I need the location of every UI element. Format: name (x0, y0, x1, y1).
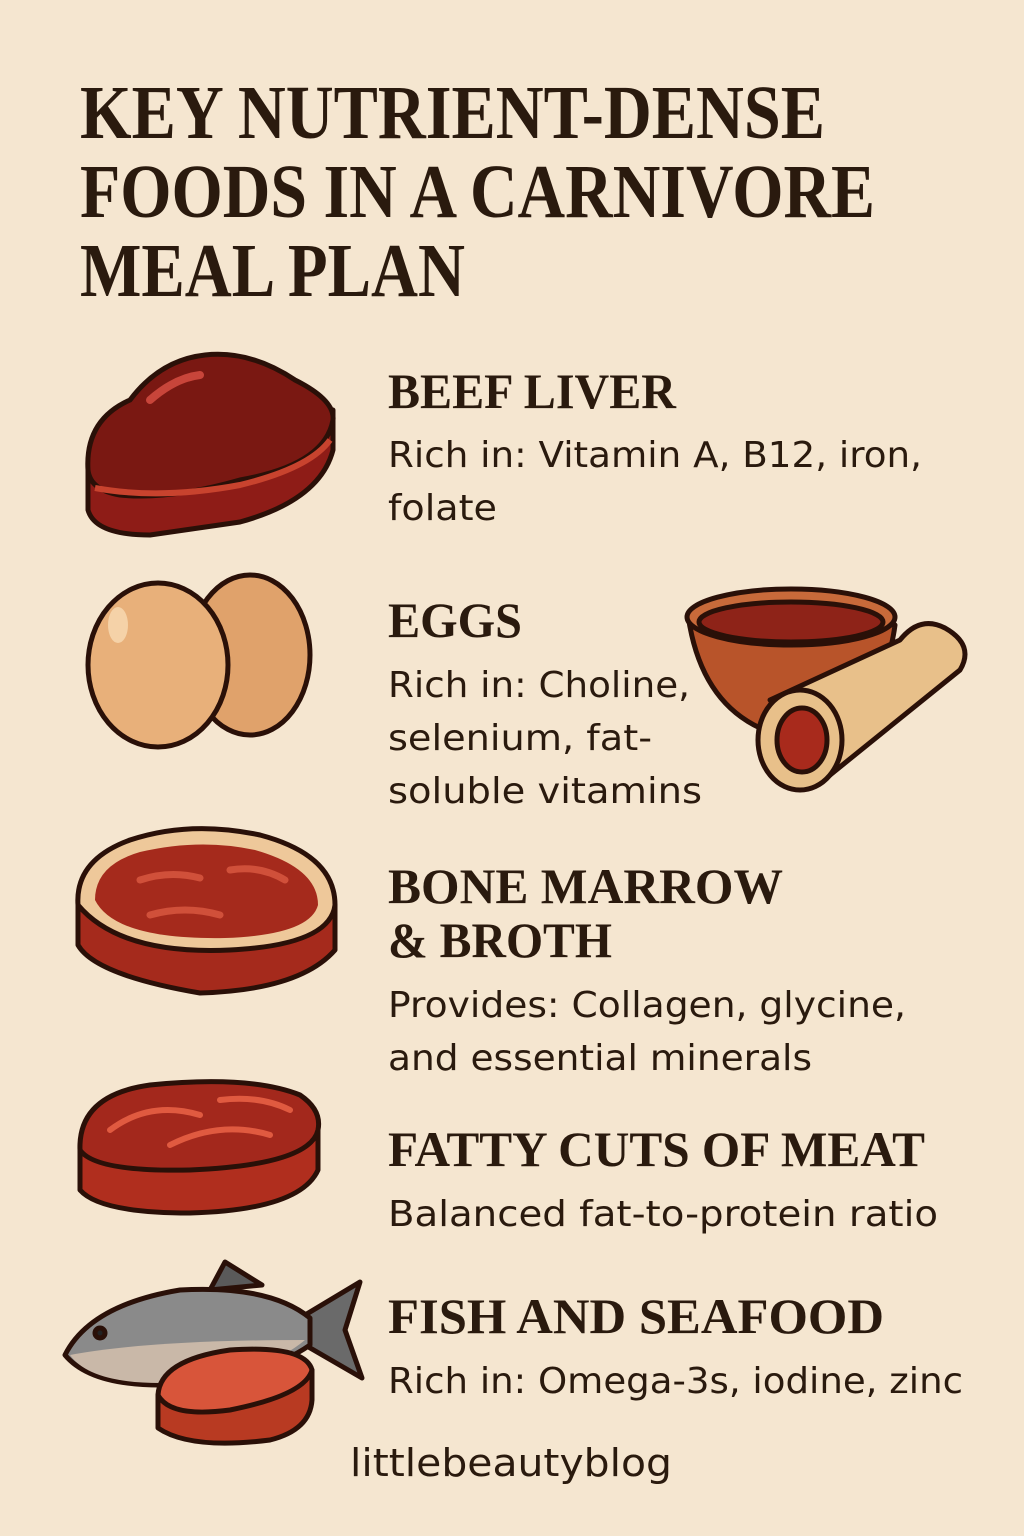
title: KEY NUTRIENT-DENSE (80, 71, 825, 155)
icon: fatty cut (80, 1082, 319, 1213)
heading: fish (388, 1288, 963, 1402)
heading: beef liver: BEEF LIVER (388, 363, 677, 419)
text: eggs (388, 665, 702, 812)
text: eggs: soluble vitamins (388, 771, 702, 812)
icon: fish and salmon (65, 1262, 362, 1443)
icon: steak (78, 829, 335, 993)
heading: bone marrow (388, 858, 906, 1079)
text: eggs: Rich in: Choline, (388, 665, 690, 706)
footer: brand: littlebeautyblog (350, 1441, 672, 1485)
text: bone marrow (388, 985, 906, 1079)
title: MEAL PLAN (80, 229, 465, 313)
heading: fatty cuts: FATTY CUTS OF MEAT (388, 1121, 925, 1177)
text: fatty cuts: Balanced fat-to-protein ratio (388, 1194, 938, 1235)
text: bone marrow: Provides: Collagen, glycine, (388, 985, 906, 1026)
heading: bone marrow: BONE MARROW (388, 858, 783, 914)
icon: beef liver (88, 354, 333, 535)
text: eggs: selenium, fat- (388, 718, 652, 759)
heading: eggs: EGGS (388, 592, 522, 648)
heading: fish: FISH AND SEAFOOD (388, 1288, 884, 1344)
text: bone marrow: and essential minerals (388, 1038, 812, 1079)
text: beef liver (388, 435, 922, 529)
icon: eggs (88, 575, 310, 747)
heading: bone marrow: & BROTH (388, 912, 612, 968)
text: fish: Rich in: Omega-3s, iodine, zinc (388, 1361, 963, 1402)
title (80, 71, 875, 313)
heading: beef liver (388, 363, 922, 529)
title: FOODS IN A CARNIVORE (80, 150, 875, 234)
icon: broth bowl and bone (687, 589, 965, 790)
heading: fatty cuts (388, 1121, 938, 1235)
heading: eggs (388, 592, 702, 812)
text: beef liver: folate (388, 488, 497, 529)
text: beef liver: Rich in: Vitamin A, B12, iron, (388, 435, 922, 476)
